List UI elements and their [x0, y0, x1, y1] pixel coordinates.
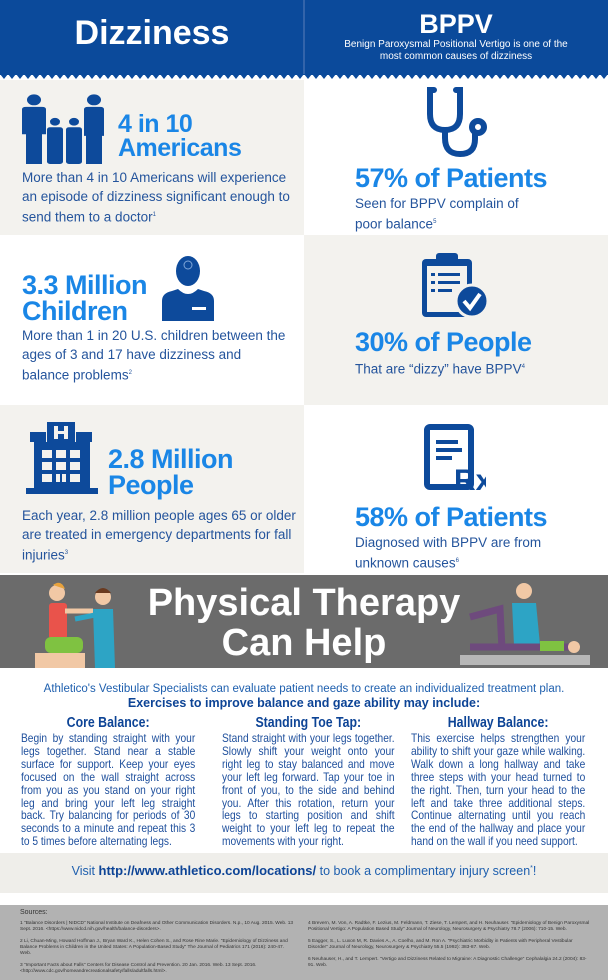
icon: child head [162, 256, 214, 321]
icon: stethoscope [427, 87, 487, 157]
stat: 57% of Patients: Seen for BPPV complain of [355, 196, 519, 211]
icon: hospital [26, 422, 98, 494]
text: americans: More than 4 in 10 Americans will experience an episode of dizziness significant enough to send them to a doctor1 [22, 170, 290, 224]
visit callout: Visit http://www.athletico.com/locations/ to book a complimentary injury screen*! [72, 863, 536, 878]
sources: 1 "Balance Disorders | NIDCD" National Institute on Deafness and Other Communication Disorders. N.p., 10 Aug. 2015. Web. 13 Sept. 2016. <https://www.nidcd.nih.gov/health/balance-disorders>. [20, 921, 293, 932]
stat: 4 in 10 Americans [118, 110, 241, 162]
heading: Physical Therapy Can Help: Can Help [222, 622, 386, 664]
stat: 58% of Patients: 58% of Patients [355, 502, 547, 532]
icon: clipboard [422, 253, 486, 317]
sources: 2 Li, Chuan-Ming, Howard Hoffman J., Bryan Ward K., Helen Cohen S., and Rose Rine Marie. "Epidemiology of Dizziness and Balance Problems in Children in the United States: A Population-Based Study" The Journal of Pediatrics 171 (2016): 240-47. Web. [20, 939, 288, 956]
sources: Sources: [20, 909, 48, 916]
exercise: hallway balance: Hallway Balance: [448, 715, 548, 731]
stat: 4 in 10 Americans: Americans [118, 134, 241, 162]
visit callout [0, 853, 608, 893]
sources: 3 "Important Facts about Falls" Centers for Disease Control and Prevention. 20 Jan. 2016. Web. 13 Sept. 2016. <http://www.cdc.gov/homeandrecreationalsafety/falls/adultfalls.html>. [20, 963, 256, 974]
exercise: standing toe tap: Stand straight with your legs together. Slowly shift your weight onto your right leg to stay balanced and move your left leg forward. Tap your toe in front of you, to the side and behind you. After this rotation, return your legs to starting position and shift weight to your left leg to repeat the movements with your right. [222, 731, 395, 848]
stat: 30% of People: 30% of People [355, 327, 532, 357]
banner: physical therapy [0, 575, 608, 668]
intro text: Exercises to improve balance and gaze ability may include: [128, 696, 480, 710]
stat: 2.8 Million People: People [108, 470, 194, 500]
stat: 4 in 10 Americans: 4 in 10 [118, 110, 192, 138]
sources: 4 Brevern, M. Von, A. Radtke, F. Lezius, M. Feldmann, T. Ziese, T. Lempert, and H. Neuhauser. "Epidemiology of Benign Paroxysmal Positional Vertigo: A Population Based Study" Journal of Neurology, Neurosurgery & Psychiatry 78.7 (2006): 710-15. Web. [308, 921, 589, 932]
icon: family [22, 94, 104, 164]
stat: 58% of Patients: Diagnosed with BPPV are from [355, 535, 541, 550]
stat: 58% of Patients [355, 502, 547, 570]
stat: 3.3 Million Children: Children [22, 296, 128, 326]
stat: 57% of Patients: 57% of Patients [355, 163, 547, 193]
exercise: core balance: Core Balance: [67, 715, 150, 731]
title: BPPV: most common causes of dizziness [380, 51, 532, 62]
exercise: core balance: Begin by standing straight with your legs together. Stand near a stable surface for support. Keep your eyes focused on the wall straight across from you as you stand on your right leg and bring your left leg straight back. Try balancing for periods of 30 seconds to a minute and repeat this 3 to 5 times before alternating legs. [21, 731, 195, 848]
title: BPPV [344, 9, 568, 62]
header band [0, 0, 608, 79]
stat: 30% of People [355, 327, 532, 376]
exercise: standing toe tap: Standing Toe Tap: [255, 715, 361, 731]
title: BPPV: Benign Paroxysmal Positional Vertigo is one of the [344, 39, 568, 50]
icon: rx [424, 424, 486, 494]
row backgrounds [0, 80, 304, 235]
exercise: hallway balance: This exercise helps strengthen your ability to shift your gaze while walking. Walk down a long hallway and take three steps with your head turned to the right. Then, turn your head to the left and take three additional steps. Continue alternating until you reach the end of the hallway and place your hand on the wall if you need support. [411, 731, 585, 848]
stat: 58% of Patients: unknown causes6 [355, 556, 459, 570]
text: people: Each year, 2.8 million people ages 65 or older are treated in emergency departments for fall injuries3 [22, 508, 296, 562]
illustration: therapist right [460, 583, 590, 665]
sources: 5 Eagger, S., L. Luxon M, R. Davies A., A. Coelho, and M. Ron A. "Psychiatric Morbidity in Patients with Peripheral Vestibular Disorder" Journal of Neurology, Neurosurgery & Psychiatry 55.5 (1992): 383-87. Web. [308, 939, 573, 950]
stat: 2.8 Million People: 2.8 Million [108, 444, 233, 474]
sources [0, 905, 608, 980]
stat: 57% of Patients [355, 163, 547, 232]
title: Dizziness: Dizziness [75, 14, 229, 52]
intro text: Athletico's Vestibular Specialists can evaluate patient needs to create an individualized treatment plan. [44, 683, 564, 695]
stat: 3.3 Million Children [22, 270, 147, 326]
stat: 30% of People: That are “dizzy” have BPPV4 [355, 362, 525, 376]
text: children: More than 1 in 20 U.S. children between the ages of 3 and 17 have dizziness and balance problems2 [22, 328, 285, 382]
illustration: therapists left [35, 582, 115, 668]
stat: 57% of Patients: poor balance5 [355, 216, 436, 232]
title: BPPV: BPPV [419, 9, 493, 39]
heading: Physical Therapy Can Help [148, 582, 460, 664]
stat: 3.3 Million Children: 3.3 Million [22, 270, 147, 300]
heading: Physical Therapy Can Help: Physical Therapy [148, 582, 460, 624]
intro text [44, 683, 564, 710]
sources: 6 Neuhauser, H., and T. Lempert. "Vertigo and Dizziness Related to Migraine: A Diagnostic Challenge" Cephalalgia 24.2 (2004): 83-91. Web. [308, 957, 587, 968]
stat: 2.8 Million People [108, 444, 233, 500]
